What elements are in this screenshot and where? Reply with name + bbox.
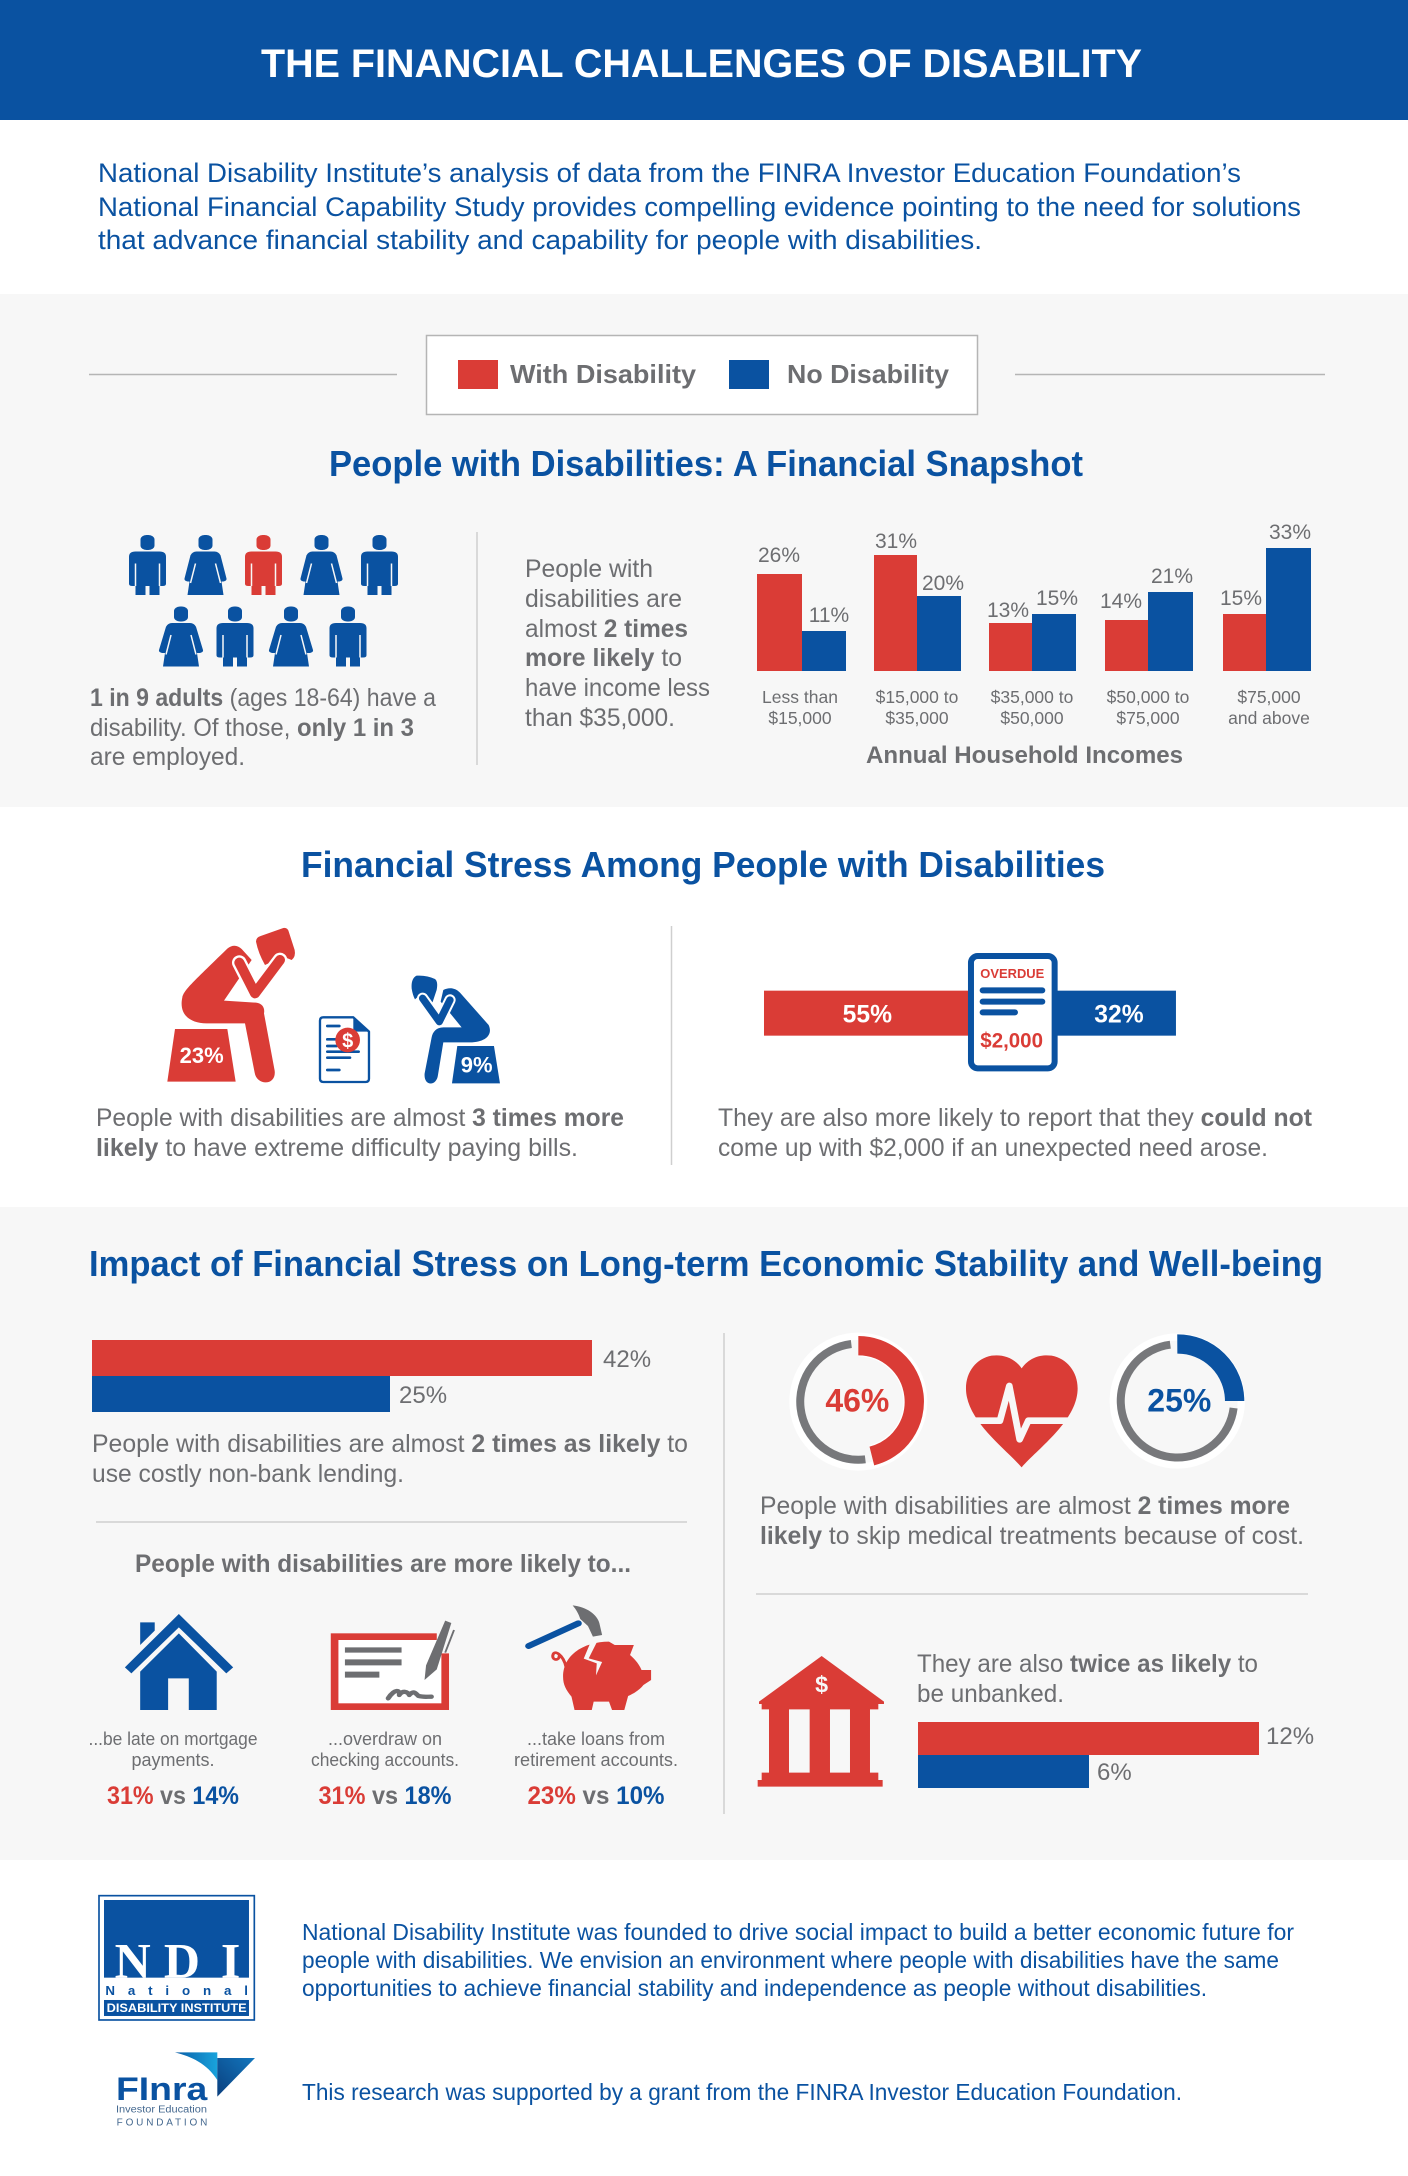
icon: piggy bank and hammer bbox=[529, 1605, 651, 1710]
bar chart: annual household incomes: 13% bbox=[987, 599, 1029, 622]
subheading: more likely to: People with disabilities are more likely to... bbox=[135, 1550, 631, 1578]
text: skip medical treatments: likely to skip medical treatments because of cost. bbox=[760, 1522, 1304, 1550]
text: 1 in 9 adults: 1 in 9 adults (ages 18-64) have a bbox=[90, 684, 436, 712]
bar chart: annual household incomes: $35,000 to bbox=[991, 687, 1073, 707]
logo: FINRA Investor Education Foundation: FInra bbox=[116, 2071, 208, 2107]
logo: National Disability Institute bbox=[99, 1896, 254, 2020]
intro paragraph: that advance financial stability and capability for people with disabilities. bbox=[98, 225, 982, 255]
icon: bill document bbox=[320, 1017, 369, 1082]
bar chart: annual household incomes: $35,000 bbox=[885, 708, 949, 728]
donut chart: 46% bbox=[793, 1336, 924, 1467]
item: mortgage: ...be late on mortgage bbox=[88, 1729, 258, 1749]
bar chart: annual household incomes: 11% bbox=[809, 604, 849, 627]
intro paragraph: National Disability Institute’s analysis of data from the FINRA Investor Education Foundation’s bbox=[98, 158, 1241, 188]
text: about NDI: opportunities to achieve financial stability and independence as people without disabilities. bbox=[302, 1975, 1207, 2001]
bar chart: annual household incomes: 26% bbox=[758, 544, 800, 567]
text: 1 in 9 adults: are employed. bbox=[90, 743, 245, 771]
item: overdraw: ...overdraw on bbox=[328, 1729, 442, 1749]
bar chart: annual household incomes: $75,000 bbox=[1237, 687, 1301, 707]
text: about NDI: people with disabilities. We envision an environment where people with disabilities have the same bbox=[302, 1947, 1279, 1973]
item: retirement loans: ...take loans from bbox=[527, 1729, 665, 1749]
intro paragraph bbox=[98, 158, 1301, 255]
bar chart: annual household incomes bbox=[757, 521, 1311, 769]
logo: National Disability Institute: I bbox=[221, 1933, 240, 1989]
logo: FINRA Investor Education Foundation: FOUNDATION bbox=[117, 2118, 207, 2129]
heading: financial stress: Financial Stress Among People with Disabilities bbox=[301, 844, 1105, 885]
bar chart: annual household incomes: $15,000 bbox=[768, 708, 832, 728]
text: income likelihood bbox=[525, 555, 710, 732]
item: mortgage bbox=[88, 1614, 258, 1810]
text: $2,000 emergency: come up with $2,000 if an unexpected need arose. bbox=[718, 1134, 1268, 1162]
bar chart: unbanked: 12% bbox=[1266, 1723, 1314, 1750]
text: $2,000 emergency bbox=[718, 1104, 1313, 1162]
text: income likelihood: than $35,000. bbox=[525, 704, 675, 732]
bar chart: annual household incomes: 15% bbox=[1036, 587, 1078, 610]
icon: check and pen bbox=[335, 1621, 456, 1707]
panel: impact of financial stress bbox=[0, 1207, 1408, 1860]
icon: group of nine people bbox=[129, 535, 398, 666]
logo: FINRA Investor Education Foundation bbox=[116, 2052, 255, 2129]
chart: could not come up with $2,000: 32% bbox=[1094, 1002, 1144, 1029]
bar chart: annual household incomes: and above bbox=[1228, 708, 1310, 728]
item: mortgage: 31% vs 14% bbox=[107, 1782, 239, 1810]
bar chart: annual household incomes: 33% bbox=[1269, 521, 1311, 544]
item: overdraw: checking accounts. bbox=[311, 1750, 459, 1770]
donut chart: 25%: 25% bbox=[1147, 1382, 1211, 1418]
text: non-bank lending: People with disabilities are almost 2 times as likely to bbox=[92, 1430, 688, 1458]
icon: overdue bill: OVERDUE bbox=[980, 966, 1045, 981]
title: THE FINANCIAL CHALLENGES OF DISABILITY bbox=[261, 42, 1142, 86]
header banner bbox=[0, 0, 1408, 120]
donut chart: 46%: 46% bbox=[825, 1382, 889, 1418]
icon: house bbox=[125, 1614, 233, 1710]
bar chart: annual household incomes: $75,000 bbox=[1116, 708, 1180, 728]
text: skip medical treatments: People with disabilities are almost 2 times more bbox=[760, 1492, 1290, 1520]
text: $2,000 emergency: They are also more likely to report that they could not bbox=[718, 1104, 1313, 1132]
icon: stressed person blue 9%: 9% bbox=[461, 1052, 493, 1077]
item: mortgage: payments. bbox=[131, 1750, 215, 1770]
logo: National Disability Institute: N bbox=[115, 1933, 151, 1989]
bar chart: non-bank lending: 42% bbox=[603, 1346, 651, 1373]
footer bbox=[99, 1896, 1294, 2129]
text: income likelihood: have income less bbox=[525, 674, 710, 702]
text: unbanked: They are also twice as likely to bbox=[917, 1650, 1258, 1678]
text: difficulty paying bills: likely to have extreme difficulty paying bills. bbox=[96, 1134, 578, 1162]
chart: could not come up with $2,000 bbox=[764, 956, 1176, 1068]
bar chart: non-bank lending bbox=[92, 1340, 651, 1412]
heading: financial snapshot: People with Disabilities: A Financial Snapshot bbox=[329, 443, 1083, 484]
text: 1 in 9 adults: disability. Of those, only 1 in 3 bbox=[90, 714, 414, 742]
text: difficulty paying bills: People with disabilities are almost 3 times more bbox=[96, 1104, 624, 1132]
logo: National Disability Institute: DISABILITY INSTITUTE bbox=[107, 2002, 247, 2015]
bar chart: unbanked bbox=[918, 1722, 1314, 1788]
donut chart: 25% bbox=[1113, 1337, 1241, 1465]
text: non-bank lending bbox=[92, 1430, 688, 1488]
bar chart: annual household incomes: 14% bbox=[1100, 590, 1142, 613]
intro paragraph: National Financial Capability Study provides compelling evidence pointing to the need for solutions bbox=[98, 192, 1301, 222]
icon: bank bbox=[758, 1656, 884, 1787]
item: retirement loans bbox=[514, 1605, 678, 1810]
heading: impact: Impact of Financial Stress on Long-term Economic Stability and Well-being bbox=[89, 1243, 1323, 1284]
text: non-bank lending: use costly non-bank lending. bbox=[92, 1460, 404, 1488]
text: unbanked bbox=[917, 1650, 1258, 1708]
item: retirement loans: retirement accounts. bbox=[514, 1750, 678, 1770]
bar chart: annual household incomes: $50,000 to bbox=[1107, 687, 1189, 707]
icon: heart with pulse bbox=[966, 1355, 1078, 1467]
legend: With Disability bbox=[510, 359, 697, 389]
text: unbanked: be unbanked. bbox=[917, 1680, 1064, 1708]
text: about NDI: National Disability Institute was founded to drive social impact to build a better economic future for bbox=[302, 1919, 1294, 1945]
icon: bank: $ bbox=[815, 1671, 828, 1697]
icon: overdue bill: $2,000 bbox=[980, 1028, 1043, 1052]
logo: FINRA Investor Education Foundation: Investor Education bbox=[116, 2105, 207, 2116]
icon: stressed person blue 9% bbox=[412, 976, 500, 1084]
panel: financial snapshot bbox=[0, 294, 1408, 807]
icon: stressed person red 23%: 23% bbox=[180, 1043, 224, 1068]
text: income likelihood: disabilities are bbox=[525, 585, 682, 613]
text: income likelihood: almost 2 times bbox=[525, 615, 688, 643]
icon: overdue bill bbox=[971, 956, 1055, 1068]
bar chart: annual household incomes: 21% bbox=[1151, 565, 1193, 588]
bar chart: unbanked: 6% bbox=[1097, 1759, 1132, 1786]
logo: National Disability Institute: D bbox=[164, 1933, 200, 1989]
item: overdraw bbox=[311, 1621, 459, 1810]
item: retirement loans: 23% vs 10% bbox=[528, 1782, 664, 1810]
bar chart: annual household incomes: 20% bbox=[922, 572, 964, 595]
legend: No Disability bbox=[787, 359, 950, 389]
text: 1 in 9 adults bbox=[90, 684, 436, 771]
bar chart: annual household incomes: Less than bbox=[762, 687, 838, 707]
legend bbox=[426, 336, 978, 414]
logo: National Disability Institute: National bbox=[105, 1983, 248, 1998]
text: income likelihood: People with bbox=[525, 555, 653, 583]
text: about NDI bbox=[302, 1919, 1294, 2001]
text: difficulty paying bills bbox=[96, 1104, 624, 1162]
icon: bill document: $ bbox=[342, 1030, 353, 1052]
panel: financial stress bbox=[96, 844, 1313, 1165]
bar chart: annual household incomes: Annual Household Incomes bbox=[866, 742, 1183, 769]
text: income likelihood: more likely to bbox=[525, 644, 682, 672]
chart: could not come up with $2,000: 55% bbox=[843, 1002, 892, 1029]
bar chart: annual household incomes: $50,000 bbox=[1000, 708, 1064, 728]
bar chart: annual household incomes: $15,000 to bbox=[876, 687, 958, 707]
icon: stressed person red 23% bbox=[167, 928, 295, 1082]
text: skip medical treatments bbox=[760, 1492, 1304, 1550]
bar chart: non-bank lending: 25% bbox=[399, 1382, 447, 1409]
bar chart: annual household incomes: 15% bbox=[1220, 587, 1262, 610]
item: overdraw: 31% vs 18% bbox=[318, 1782, 452, 1810]
bar chart: annual household incomes: 31% bbox=[875, 530, 917, 553]
text: grant acknowledgement: This research was supported by a grant from the FINRA Investor Education Foundation. bbox=[302, 2079, 1182, 2105]
